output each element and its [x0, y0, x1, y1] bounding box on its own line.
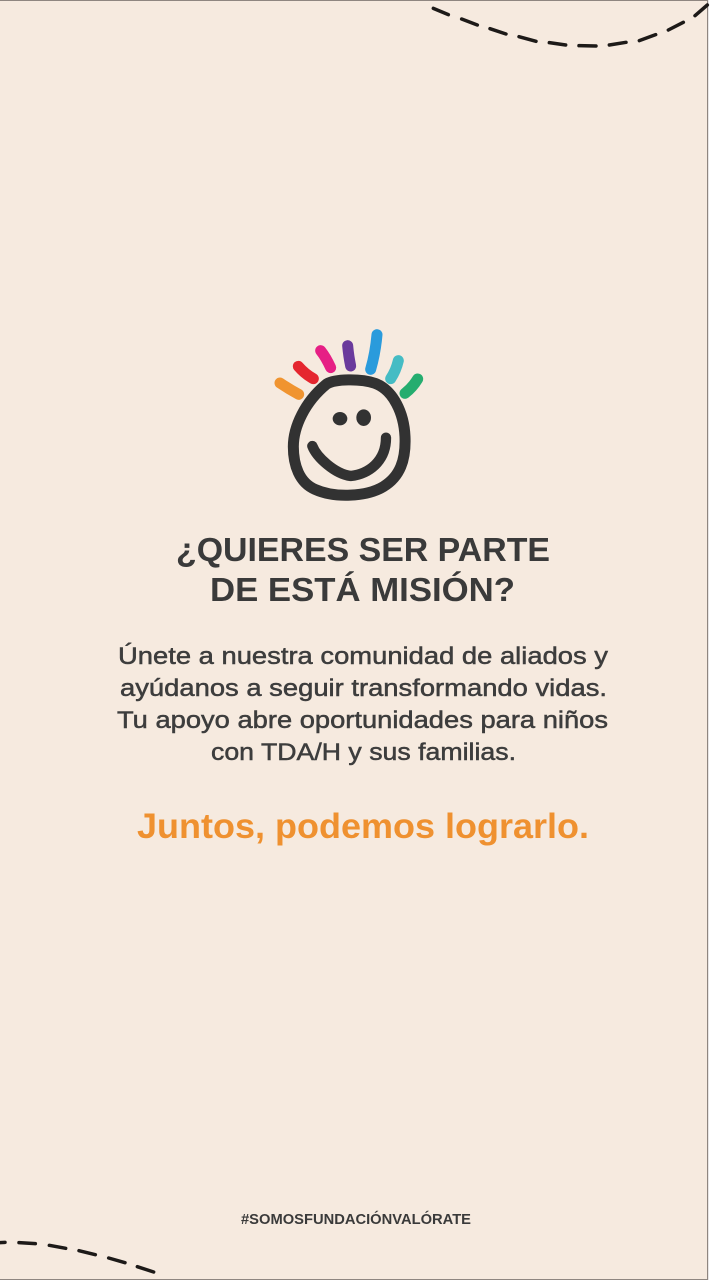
heading: ¿QUIERES SER PARTE [176, 532, 550, 569]
body text: ayúdanos a seguir transformando vidas. [120, 675, 607, 702]
body text [117, 643, 609, 766]
hashtag: #SOMOSFUNDACIÓNVALÓRATE [241, 1210, 471, 1228]
logo eyes [333, 409, 371, 426]
orange call to action: Juntos, podemos lograrlo. [137, 807, 589, 846]
logo head outline [293, 380, 405, 495]
body text: con TDA/H y sus familias. [211, 739, 516, 766]
body text: Tu apoyo abre oportunidades para niños [117, 707, 608, 734]
heading: DE ESTÁ MISIÓN? [210, 571, 515, 609]
body text: Únete a nuestra comunidad de aliados y [118, 643, 609, 670]
logo hair strokes [280, 335, 418, 394]
logo smile [312, 438, 386, 476]
heading [176, 532, 550, 609]
decorative dashed curve: bottom left [0, 1242, 154, 1272]
decorative dashed curve: top right [433, 5, 707, 46]
logo: smiling face with rainbow hair [280, 335, 418, 495]
